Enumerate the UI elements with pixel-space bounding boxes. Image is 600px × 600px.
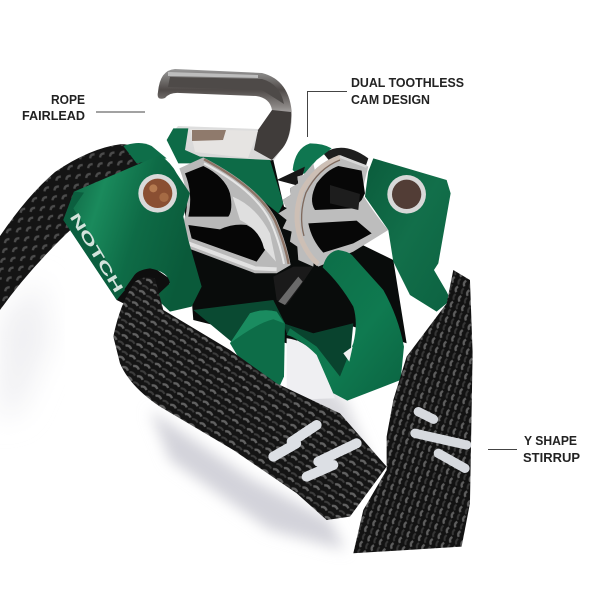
strap: loop behind right cam: [323, 148, 368, 168]
hook: rope fairlead: [158, 69, 292, 163]
small green tab top right: [293, 143, 332, 175]
white gap below the frame: [287, 338, 335, 400]
right cam: [295, 155, 388, 267]
cam axle black rubber detail: [273, 267, 313, 305]
green right body: [365, 158, 451, 312]
strap loop through left body slot: [117, 265, 172, 307]
device centre: dark mass and green back plate: [63, 128, 451, 401]
callout: dual toothless cam design: CAM DESIGN: [351, 93, 430, 107]
callout: y shape stirrup: STIRRUP: [523, 451, 580, 465]
callout: rope fairlead: [22, 93, 145, 123]
green left body: [63, 155, 202, 312]
callout: dual toothless cam design: DUAL TOOTHLESS: [351, 76, 464, 90]
stitching right: [415, 412, 467, 468]
white gap notch: [343, 347, 353, 362]
callout: rope fairlead: ROPE: [51, 93, 85, 107]
strap: right webbing: [353, 270, 473, 553]
soft shadows: [0, 280, 370, 550]
rivet left: [138, 174, 177, 213]
callout: y shape stirrup: Y SHAPE: [524, 434, 577, 448]
callout: rope fairlead: FAIRLEAD: [22, 109, 85, 123]
green lower right lever: [287, 250, 404, 401]
strap: lower left webbing: [113, 277, 387, 520]
callout: y shape stirrup: [488, 434, 580, 465]
gear teeth: [277, 167, 327, 267]
brand label: NOTCH: [67, 210, 127, 295]
green small tab: [230, 310, 285, 400]
left cam: [179, 157, 291, 273]
stitching left: [273, 425, 357, 477]
callout: dual toothless cam design: [308, 76, 464, 137]
strap: upper left webbing: [0, 144, 150, 310]
rivet right: [387, 175, 426, 214]
green tab behind upper strap: [123, 143, 167, 163]
